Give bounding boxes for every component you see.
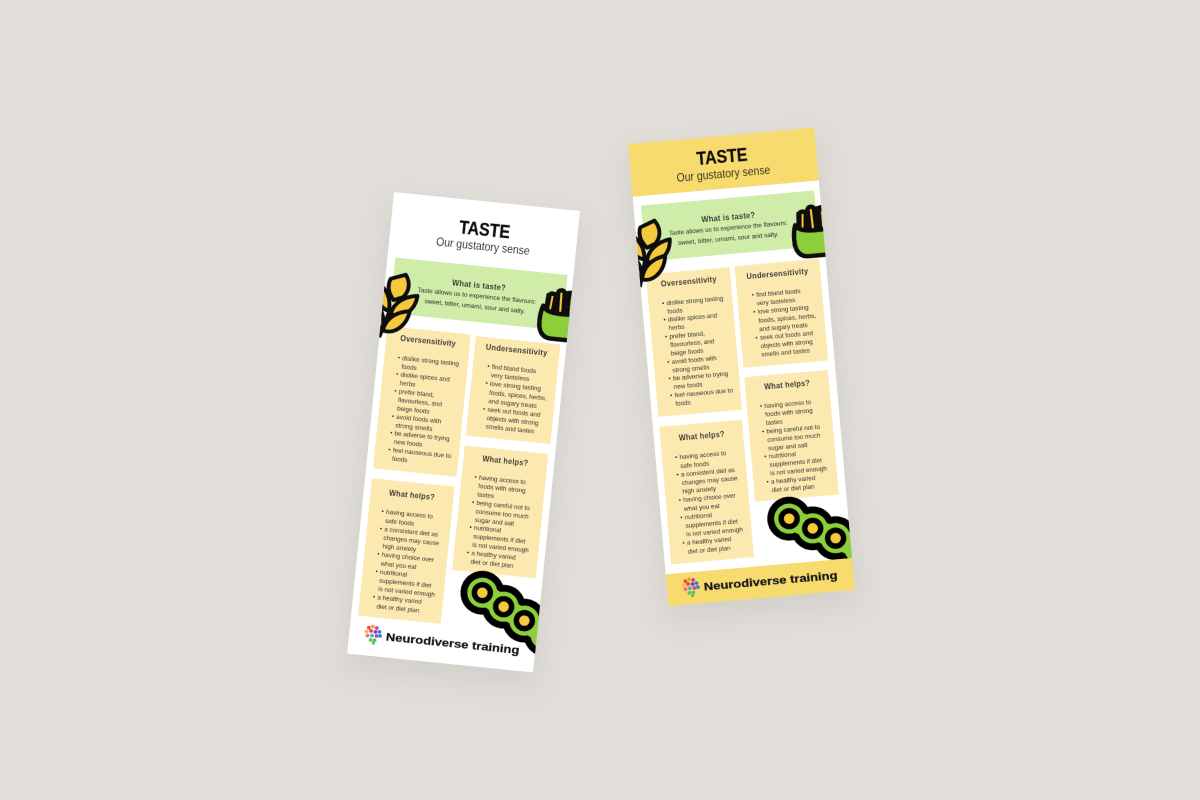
panel: oversensitivity: herbs [399, 380, 416, 389]
panel: what helps (undersensitivity): consume too much [475, 508, 529, 521]
panel: oversensitivity: dislike spices and [400, 372, 450, 384]
panel: what is taste [641, 190, 819, 261]
title: TASTE [696, 145, 748, 169]
panel: what helps (undersensitivity): is not varied enough [770, 465, 828, 477]
panel: what helps (undersensitivity): supplements if diet [473, 533, 526, 546]
panel: what helps (undersensitivity): • [469, 525, 472, 532]
panel: what helps (undersensitivity) [744, 370, 839, 502]
panel: white bookmark card [347, 192, 580, 684]
panel: oversensitivity: dislike strong tasting [402, 355, 460, 368]
panel: undersensitivity: • [483, 406, 486, 413]
icon: fries [538, 288, 577, 341]
panel: what helps (oversensitivity): What helps? [389, 489, 435, 502]
panel: what helps (undersensitivity): is not varied enough [472, 542, 529, 555]
panel: oversensitivity: • [670, 393, 673, 400]
panel: what is taste: Taste allows us to experience the flavours: [669, 220, 788, 237]
panel: what helps (undersensitivity): • [766, 479, 769, 486]
panel: undersensitivity: find bland foods [756, 288, 801, 299]
panel: what helps (undersensitivity): consume too much [767, 432, 821, 444]
panel: undersensitivity: seek out foods and [487, 407, 541, 419]
panel: what is taste: sweet, bitter, umami, sour and salty. [424, 298, 526, 315]
header band [628, 128, 819, 197]
panel: what helps (oversensitivity) [358, 478, 455, 624]
panel: undersensitivity: • [751, 292, 754, 299]
panel: oversensitivity: • [663, 317, 666, 324]
panel: oversensitivity: strong smells [395, 422, 433, 433]
panel: oversensitivity: flavourless, and [398, 397, 443, 408]
panel: undersensitivity: • [485, 380, 488, 388]
panel: undersensitivity: seek out foods and [760, 330, 814, 342]
panel: undersensitivity: • [755, 335, 758, 342]
panel: what helps (undersensitivity): being careful not to [476, 500, 531, 512]
panel: oversensitivity: avoid foods with [671, 355, 717, 366]
panel: what helps (undersensitivity): • [474, 474, 477, 481]
panel: oversensitivity: new foods [674, 382, 703, 391]
panel: oversensitivity: foods [401, 363, 417, 372]
panel: oversensitivity: foods [675, 399, 691, 408]
panel: what helps (oversensitivity): • [373, 594, 375, 601]
panel: what helps (oversensitivity): having choice over [683, 493, 736, 504]
panel: undersensitivity: foods, spices, herbs, [758, 313, 817, 325]
panel: what helps (oversensitivity): a healthy varied [377, 595, 422, 606]
panel: what helps (undersensitivity): having access to [479, 475, 527, 486]
panel: what helps (oversensitivity): nutritional [684, 512, 712, 521]
panel: what helps (oversensitivity): supplements if diet [379, 578, 432, 590]
panel: undersensitivity: • [753, 309, 756, 316]
panel: what helps (oversensitivity): • [377, 551, 380, 559]
panel: undersensitivity: objects with strong [486, 415, 539, 427]
panel: what helps (oversensitivity): safe foods [385, 518, 414, 528]
panel: what helps (undersensitivity): sugar and salt [474, 517, 515, 528]
panel: what helps (oversensitivity): a consistent diet as [681, 467, 735, 479]
panel: oversensitivity: Oversensitivity [660, 275, 717, 289]
icon: peas [766, 496, 853, 569]
panel: oversensitivity: be adverse to trying [673, 371, 729, 383]
panel: what is taste [390, 257, 568, 331]
panel: what helps (undersensitivity): • [467, 550, 469, 557]
panel: what helps (undersensitivity): • [764, 454, 767, 461]
panel: oversensitivity: prefer bland, [669, 331, 705, 341]
panel: what is taste: What is taste? [701, 211, 756, 224]
title: TASTE [458, 217, 511, 242]
panel: what helps (oversensitivity): • [680, 515, 683, 522]
panel: oversensitivity: beige foods [397, 405, 430, 416]
panel: oversensitivity: new foods [393, 439, 423, 449]
panel: what helps (undersensitivity): • [472, 499, 475, 507]
panel: what helps (oversensitivity): What helps? [678, 430, 725, 443]
panel: undersensitivity [466, 336, 560, 444]
panel: what helps (undersensitivity): nutritional [769, 451, 796, 461]
panel: oversensitivity: strong smells [672, 364, 710, 374]
panel: what helps (undersensitivity): foods with strong [765, 407, 813, 419]
panel: what helps (oversensitivity): • [375, 568, 378, 576]
panel: what helps (undersensitivity): being careful not to [766, 424, 821, 435]
panel: oversensitivity: dislike strong tasting [666, 295, 724, 307]
panel: what helps (oversensitivity): • [675, 455, 678, 462]
panel: oversensitivity: • [667, 359, 670, 366]
panel: what helps (undersensitivity): nutritional [474, 525, 501, 535]
panel: oversensitivity: • [394, 388, 397, 395]
panel: what is taste: Taste allows us to experience the flavours: [417, 287, 537, 306]
body content [636, 190, 853, 569]
panel: what helps (oversensitivity): what you eat [380, 560, 417, 571]
panel: what helps (oversensitivity): high anxiety [682, 486, 717, 496]
panel: undersensitivity: and sugary treats [488, 398, 537, 410]
panel: what helps (oversensitivity): • [379, 526, 382, 533]
panel: undersensitivity: • [487, 363, 490, 371]
logo wordmark: Neurodiverse training [703, 570, 838, 594]
panel: undersensitivity: Undersensitivity [746, 267, 809, 281]
panel: what helps (oversensitivity): having access to [679, 450, 727, 461]
panel: oversensitivity: feel nauseous due to [392, 447, 452, 460]
subtitle: Our gustatory sense [436, 235, 531, 258]
panel: oversensitivity: • [662, 300, 665, 308]
panel: what helps (oversensitivity): is not varied enough [686, 527, 744, 538]
icon: peas [460, 570, 540, 654]
panel: what helps (undersensitivity): tastes [477, 491, 494, 500]
panel: what helps (oversensitivity): a healthy varied [687, 536, 732, 547]
panel: what helps (undersensitivity): sugar and salt [768, 442, 808, 452]
panel: undersensitivity: very tasteless [491, 372, 530, 383]
panel: what helps (oversensitivity): diet or diet plan [376, 603, 420, 615]
panel: oversensitivity: beige foods [671, 348, 704, 357]
panel: oversensitivity: • [396, 371, 399, 379]
panel: what helps (undersensitivity): foods with strong [478, 483, 526, 495]
panel: oversensitivity: • [397, 355, 400, 362]
panel: oversensitivity: • [390, 430, 393, 437]
panel: undersensitivity: foods, spices, herbs, [489, 389, 547, 402]
panel: what helps (undersensitivity): What helps? [482, 454, 529, 468]
panel: what helps (oversensitivity): • [679, 497, 681, 505]
panel: oversensitivity: foods [667, 307, 683, 316]
panel: what helps (undersensitivity): diet or diet plan [771, 484, 815, 494]
panel: oversensitivity: prefer bland, [398, 389, 435, 399]
panel: what is taste: What is taste? [452, 278, 506, 293]
panel: oversensitivity [646, 267, 742, 417]
logo wordmark: Neurodiverse training [385, 631, 520, 657]
icon: wheat [636, 218, 672, 288]
panel: what helps (undersensitivity): a healthy varied [771, 475, 816, 486]
panel: what helps (oversensitivity): changes may cause [383, 535, 440, 547]
panel: what helps (oversensitivity): • [676, 472, 679, 479]
panel: yellow header bookmark card [628, 128, 855, 618]
panel: what helps (oversensitivity): a consistent diet as [384, 526, 438, 539]
panel: what helps (undersensitivity): diet or diet plan [470, 559, 514, 570]
panel: undersensitivity: very tasteless [757, 297, 796, 307]
panel: what helps (oversensitivity): changes may cause [681, 475, 738, 487]
panel: what helps (oversensitivity): • [682, 540, 685, 547]
panel: what helps (undersensitivity): having access to [764, 399, 812, 410]
icon: fries [791, 205, 830, 257]
panel: oversensitivity: flavourless, and [670, 338, 715, 349]
panel: oversensitivity: herbs [668, 324, 685, 332]
panel: oversensitivity: • [391, 413, 394, 420]
panel: what helps (undersensitivity): tastes [766, 418, 783, 427]
panel: what helps (undersensitivity): • [760, 403, 762, 410]
panel: what helps (undersensitivity) [452, 445, 548, 578]
panel: what helps (oversensitivity): is not varied enough [378, 586, 436, 599]
panel: what helps (oversensitivity): what you eat [683, 503, 720, 513]
panel: undersensitivity: smells and tastes [485, 424, 534, 436]
panel: oversensitivity: feel nauseous due to [674, 387, 734, 399]
panel: what helps (undersensitivity): supplements if diet [769, 458, 822, 469]
panel: what helps (oversensitivity): high anxiety [382, 543, 417, 554]
panel: what helps (undersensitivity): What helps? [764, 379, 810, 392]
panel: undersensitivity: find bland foods [491, 364, 536, 375]
panel: what helps (undersensitivity): a healthy varied [471, 550, 516, 562]
footer band [666, 558, 855, 606]
panel: undersensitivity: objects with strong [760, 339, 813, 350]
panel: what helps (oversensitivity): diet or diet plan [687, 545, 731, 556]
panel: what helps (oversensitivity): nutritional [380, 569, 408, 579]
panel: undersensitivity: love strong tasting [757, 305, 809, 316]
subtitle: Our gustatory sense [676, 163, 771, 185]
panel: what is taste: sweet, bitter, umami, sour and salty. [678, 231, 779, 247]
panel: oversensitivity: • [665, 334, 668, 341]
panel: undersensitivity [735, 259, 828, 368]
panel: undersensitivity: Undersensitivity [485, 343, 548, 358]
panel: oversensitivity: dislike spices and [668, 313, 718, 324]
logo: brain dots [363, 624, 383, 646]
panel: oversensitivity: avoid foods with [396, 414, 442, 425]
panel: what helps (oversensitivity) [659, 420, 754, 564]
panel: what helps (oversensitivity): having choice over [381, 552, 434, 564]
panel: undersensitivity: smells and tastes [761, 348, 810, 359]
panel: oversensitivity: Oversensitivity [400, 334, 457, 349]
panel: oversensitivity: • [388, 447, 391, 454]
panel: oversensitivity: • [668, 376, 671, 383]
logo: brain dots [681, 577, 701, 598]
panel: what helps (oversensitivity): safe foods [680, 460, 710, 470]
panel: undersensitivity: love strong tasting [490, 381, 542, 393]
panel: oversensitivity: be adverse to trying [394, 431, 450, 443]
panel: oversensitivity: foods [392, 456, 408, 464]
panel: what helps (oversensitivity): • [381, 509, 384, 516]
panel: undersensitivity: and sugary treats [759, 322, 808, 333]
panel: what helps (oversensitivity): having access to [386, 509, 434, 521]
panel: what helps (oversensitivity): supplements if diet [685, 518, 738, 530]
panel: what helps (undersensitivity): • [762, 429, 765, 436]
icon: wheat [379, 272, 420, 338]
panel: oversensitivity [373, 326, 471, 477]
